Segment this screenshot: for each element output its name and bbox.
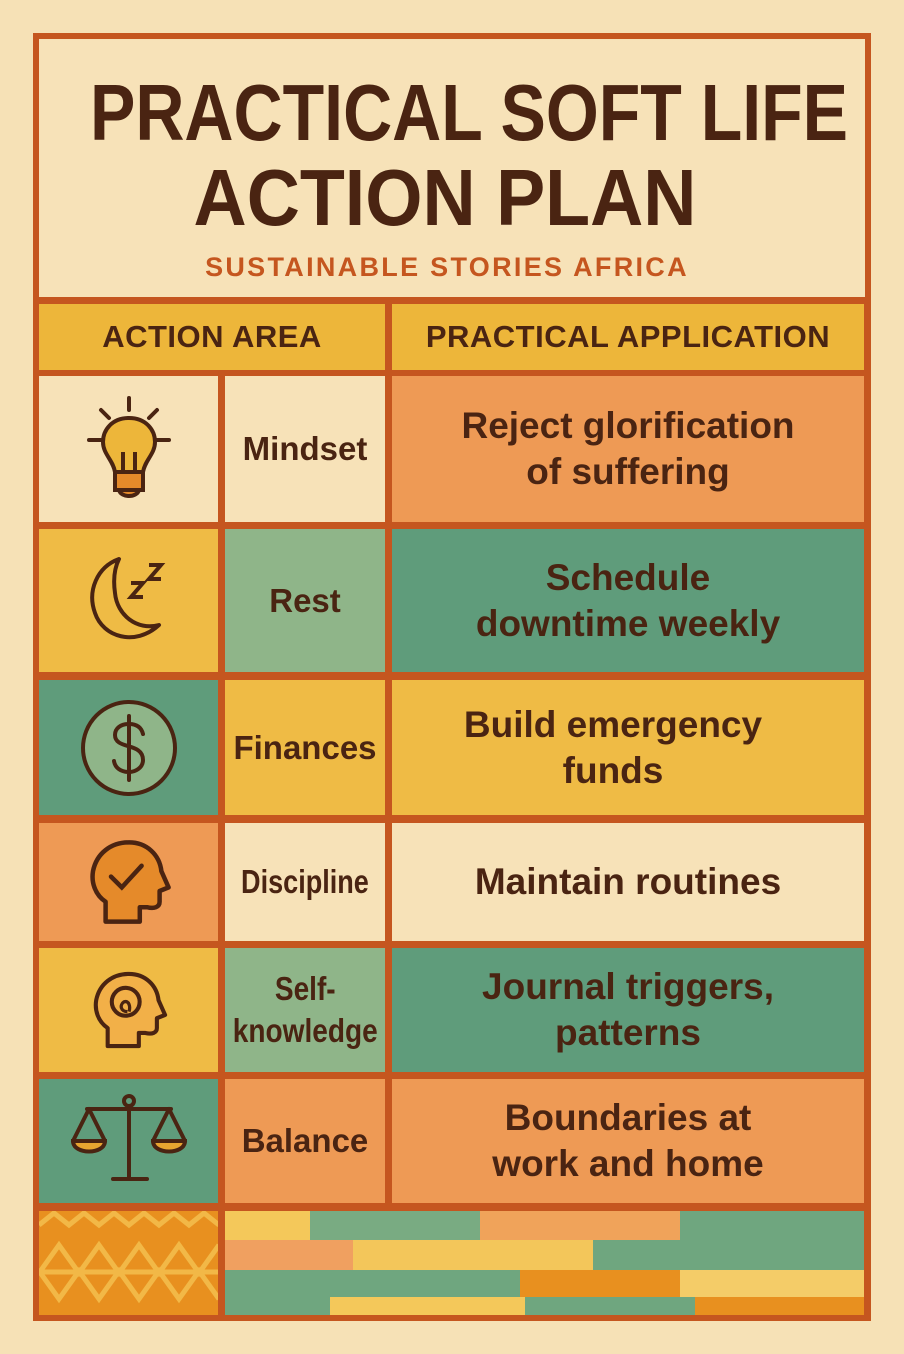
- application: rest: downtime weekly: [476, 602, 780, 644]
- title line 2: ACTION PLAN: [194, 153, 696, 242]
- icon: moon: [39, 529, 218, 672]
- application: balance: Boundaries at: [505, 1097, 751, 1138]
- row: mindset: [39, 376, 864, 522]
- application: self-knowledge: [392, 948, 864, 1072]
- title line 1: PRACTICAL SOFT LIFE: [90, 68, 848, 157]
- icon: light bulb: [39, 376, 218, 522]
- application: rest: [392, 529, 864, 672]
- label: mindset: Mindset: [243, 430, 367, 467]
- label: finances: [225, 680, 385, 815]
- icon: scales: [39, 1079, 218, 1203]
- application: finances: funds: [563, 750, 663, 790]
- label: balance: Balance: [242, 1122, 368, 1159]
- label: discipline: [225, 823, 385, 941]
- application: discipline: [392, 823, 864, 941]
- header: action area: [39, 304, 385, 370]
- application: finances: [392, 680, 864, 815]
- application: balance: [392, 1079, 864, 1203]
- row: finances: [39, 680, 864, 815]
- application: discipline: Maintain routines: [475, 861, 781, 902]
- pattern: right stripes: [225, 1211, 864, 1315]
- row: discipline: [39, 823, 864, 941]
- icon: head with check: [39, 823, 218, 941]
- application: self-knowledge: patterns: [555, 1012, 701, 1053]
- icon: dollar coin: [39, 680, 218, 815]
- label: rest: [225, 529, 385, 672]
- label: finances: Finances: [233, 728, 377, 766]
- application: mindset: Reject glorification: [461, 405, 795, 446]
- application: mindset: [392, 376, 864, 522]
- icon: head with spiral: [39, 948, 218, 1072]
- label: mindset: [225, 376, 385, 522]
- row: rest: [39, 529, 864, 672]
- application: finances: Build emergency: [464, 704, 762, 744]
- subtitle: SUSTAINABLE STORIES AFRICA: [205, 252, 689, 282]
- application: rest: Schedule: [546, 556, 710, 598]
- header: practical application: PRACTICAL APPLICATION: [426, 319, 830, 354]
- header: practical application: [392, 304, 864, 370]
- row: self-knowledge: [39, 948, 864, 1072]
- header: action area: ACTION AREA: [102, 319, 322, 354]
- row: balance: [39, 1079, 864, 1203]
- label: self-knowledge: knowledge: [233, 1012, 377, 1049]
- label: rest: Rest: [269, 582, 341, 618]
- label: discipline: Discipline: [241, 863, 369, 900]
- title panel: [39, 39, 865, 297]
- label: self-knowledge: Self-: [275, 970, 335, 1007]
- pattern: left zigzag: [39, 1211, 218, 1315]
- application: self-knowledge: Journal triggers,: [482, 966, 774, 1007]
- label: balance: [225, 1079, 385, 1203]
- application: mindset: of suffering: [526, 451, 730, 492]
- application: balance: work and home: [492, 1143, 764, 1184]
- label: self-knowledge: [225, 948, 385, 1072]
